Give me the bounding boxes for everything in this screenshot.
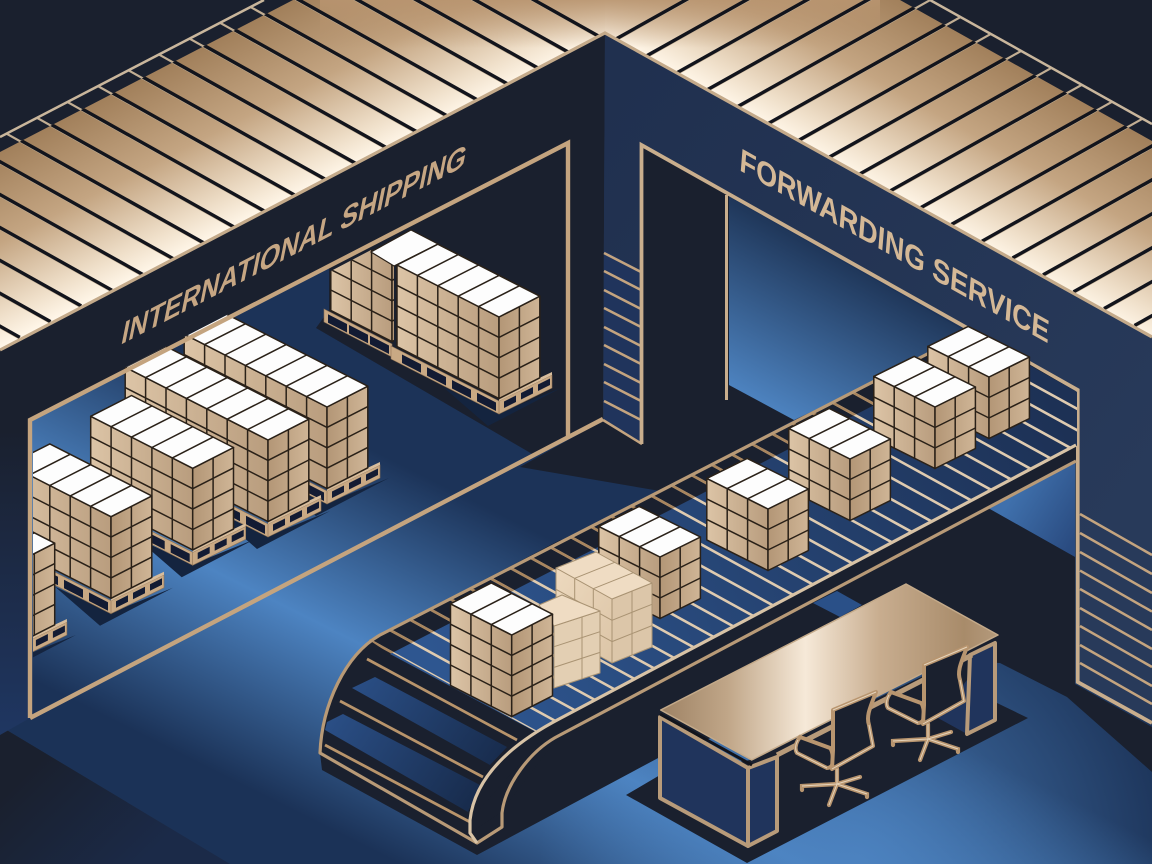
chair left — [796, 692, 876, 805]
chair right — [887, 647, 967, 760]
stack row 1 — [33, 443, 173, 626]
right wall label: FORWARDING SERVICE — [738, 141, 1051, 351]
left ceiling skylight — [0, 0, 605, 350]
boxes on conveyor: stack 6 — [789, 408, 890, 520]
right room view — [729, 197, 972, 420]
right ceiling slat lines — [615, 0, 1152, 344]
blue patch below conveyor end — [988, 463, 1075, 557]
conveyor body and floor shadow — [320, 508, 1152, 855]
desk — [660, 584, 998, 846]
light boxes tall stack — [556, 552, 652, 663]
boxes on conveyor: front stack — [450, 583, 552, 717]
light boxes short stack — [539, 595, 600, 688]
left wall label: INTERNATIONAL SHIPPING — [119, 136, 470, 352]
ladder panel between doors — [603, 250, 642, 444]
boxes on conveyor: stack 5 — [707, 458, 808, 570]
back stack: right section — [391, 244, 561, 426]
desk front support bar — [777, 655, 972, 755]
pallets of boxes in left room — [33, 230, 558, 658]
central floor shadow and dark door column — [520, 147, 794, 491]
left door frame — [30, 143, 603, 718]
wall top edge lines — [0, 33, 1152, 350]
stack row 2 — [85, 396, 255, 577]
desk top — [661, 584, 998, 760]
right wall ladder — [1080, 514, 1152, 704]
right door frame — [642, 145, 1152, 723]
inner door post — [725, 195, 728, 400]
conveyor side band — [470, 445, 1076, 833]
desk end panel — [748, 757, 777, 846]
right ceiling skylight — [605, 0, 1152, 337]
conveyor belt deck — [369, 331, 1077, 732]
boxes on conveyor: far stack — [928, 326, 1029, 438]
conveyor return windows — [325, 659, 517, 822]
boxes on conveyor: stack 7 — [874, 356, 975, 468]
desk shadow — [626, 640, 1028, 863]
bottom-left floor shadow — [0, 726, 230, 864]
right wall — [603, 33, 1152, 723]
ceiling shade near top edge — [320, 0, 880, 48]
right desk leg — [938, 643, 995, 734]
left wall — [0, 33, 605, 735]
blue floor sliver behind desk — [813, 591, 862, 617]
stack row 3 — [119, 346, 330, 549]
partial stack at left edge — [33, 531, 76, 658]
conveyor slats — [369, 382, 1077, 732]
stack row 4 — [178, 313, 389, 516]
desk underside line — [660, 714, 752, 765]
left room back wall in shadow — [316, 143, 568, 455]
floor light pool at lower right — [540, 540, 1152, 864]
conveyor rails and curves — [320, 331, 1076, 843]
back stack: left section — [324, 230, 438, 357]
left ceiling slat lines — [0, 0, 604, 339]
boxes on conveyor: stack 4 — [599, 506, 700, 618]
left desk panel — [660, 717, 748, 846]
conveyor slat stubs in shadow — [369, 392, 873, 654]
exterior background above the walls — [0, 0, 1152, 350]
